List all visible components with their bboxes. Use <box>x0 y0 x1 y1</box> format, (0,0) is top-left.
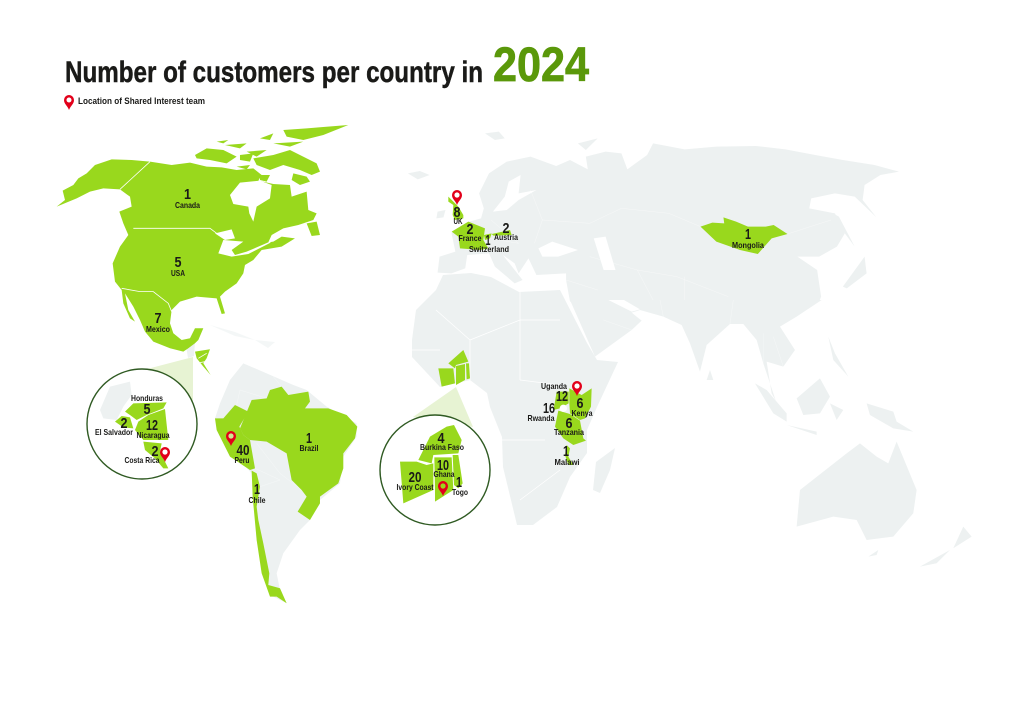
label: Nicaragua: 12 <box>146 417 158 434</box>
label: Rwanda <box>528 400 555 423</box>
Malawi <box>565 445 573 465</box>
label: Honduras: 5 <box>144 401 150 418</box>
label: Nicaragua <box>136 417 170 440</box>
label: Burkina Faso: 4 <box>438 430 445 447</box>
Hudson Bay and Great Lakes <box>215 181 272 257</box>
Uganda <box>553 392 569 410</box>
label: Ivory Coast: 20 <box>408 469 422 486</box>
Australasia and islands <box>707 337 972 567</box>
label: USA: 5 <box>174 254 182 271</box>
West Africa on map <box>438 350 470 387</box>
UK <box>448 197 463 220</box>
pin: Ghana <box>438 481 448 496</box>
Guatemala <box>186 342 195 358</box>
Brazil <box>240 387 357 520</box>
label: Rwanda: 16 <box>543 400 555 417</box>
Chile <box>252 471 287 603</box>
label: Burkina Faso: Burkina Faso <box>420 442 464 452</box>
label: Malawi: 1 <box>563 443 569 460</box>
label: France: France <box>458 233 482 243</box>
label: Mongolia: Mongolia <box>732 240 764 250</box>
label: Togo: 1 <box>456 474 462 491</box>
label: Austria: Austria <box>494 232 518 242</box>
label: Tanzania <box>554 415 584 437</box>
France <box>452 222 488 250</box>
label: USA <box>171 254 185 278</box>
Tanzania <box>555 411 586 445</box>
label: Malawi <box>554 443 580 467</box>
label: Tanzania: 6 <box>566 415 572 432</box>
label: Peru <box>234 442 250 465</box>
label: El Salvador: El Salvador <box>95 427 134 437</box>
label: Togo: Togo <box>452 487 468 497</box>
Eurasia <box>408 132 899 302</box>
label: Tanzania: Tanzania <box>554 427 584 437</box>
label: Mexico <box>146 310 170 334</box>
label: Canada: Canada <box>175 200 200 210</box>
label: Honduras: Honduras <box>131 393 163 403</box>
Peru <box>215 405 255 470</box>
label: Kenya: 6 <box>576 395 584 412</box>
label: Malawi: Malawi <box>554 457 580 467</box>
Arctic islands <box>195 125 348 236</box>
label: Mexico: Mexico <box>146 324 170 334</box>
label: Ghana <box>434 457 455 479</box>
label: Nicaragua: Nicaragua <box>136 430 170 440</box>
East Africa customers <box>553 388 592 465</box>
label: Uganda: Uganda <box>541 381 567 391</box>
label: Honduras <box>131 393 163 418</box>
title: 2024 <box>493 39 589 92</box>
label: Uganda <box>541 381 568 405</box>
Mongolia <box>701 217 787 254</box>
label: Burkina Faso <box>420 430 464 452</box>
inset circle: Central America <box>87 369 197 479</box>
inset pointer: West Africa <box>413 387 473 427</box>
title <box>65 39 589 92</box>
label: Chile: Chile <box>248 495 266 505</box>
pin: Kenya <box>572 381 582 396</box>
label: Brazil: 1 <box>306 430 312 447</box>
pin: UK <box>452 190 462 205</box>
label: France: 2 <box>466 221 474 238</box>
label: Ghana: Ghana <box>434 469 455 479</box>
label: Costa Rica: Costa Rica <box>124 455 160 465</box>
Madagascar <box>593 448 615 493</box>
label: Uganda: 12 <box>556 388 568 405</box>
label: Ivory Coast: Ivory Coast <box>396 482 434 492</box>
pin: Peru <box>226 431 236 446</box>
inset pointer: Central America <box>147 357 193 405</box>
label: Kenya: Kenya <box>572 408 593 418</box>
label: UK: 8 <box>454 204 460 221</box>
label: El Salvador <box>95 415 134 437</box>
South America <box>215 363 357 603</box>
label: Kenya <box>572 395 593 418</box>
label: Austria <box>494 220 518 242</box>
North America <box>57 125 348 375</box>
title: Number of customers per country in <box>65 56 483 89</box>
label: Switzerland <box>469 232 509 254</box>
Kenya <box>569 388 592 420</box>
Switzerland <box>484 233 492 240</box>
Europe customers <box>448 197 512 250</box>
label: Costa Rica: 2 <box>152 443 158 460</box>
label: Ghana: 10 <box>437 457 449 474</box>
legend: team location <box>64 95 205 110</box>
label: Rwanda: Rwanda <box>528 413 555 423</box>
label: Chile <box>248 481 266 505</box>
inset circle: West Africa <box>380 415 490 525</box>
label: Switzerland: 1 <box>486 232 490 249</box>
label: Brazil: Brazil <box>300 443 318 453</box>
Central America <box>195 349 211 375</box>
label: Peru: Peru <box>234 455 250 465</box>
label: Mongolia <box>732 226 764 250</box>
label: France <box>458 221 482 243</box>
label: El Salvador: 2 <box>120 415 128 432</box>
label: Austria: 2 <box>502 220 510 237</box>
world map: grey land <box>186 132 972 603</box>
pin: Costa Rica <box>160 447 170 462</box>
label: Brazil <box>300 430 318 453</box>
label: Peru: 40 <box>236 442 250 459</box>
label: Mongolia: 1 <box>745 226 751 243</box>
Caribbean <box>210 325 275 348</box>
label: Mexico: 7 <box>154 310 162 327</box>
Canada, USA, Mexico <box>57 159 317 352</box>
label: Costa Rica <box>124 443 160 465</box>
South Asia, Arabia and south-east Asia <box>570 300 822 420</box>
label: UK: UK <box>454 216 463 226</box>
label: Ivory Coast <box>396 469 434 492</box>
Africa <box>412 273 618 525</box>
Austria <box>492 230 512 236</box>
label: Chile: 1 <box>254 481 260 498</box>
label: Canada <box>175 186 200 210</box>
label: Canada: 1 <box>184 186 191 203</box>
label: USA: USA <box>171 268 185 278</box>
South America customers <box>215 387 357 603</box>
label: UK <box>454 204 463 226</box>
label: Togo <box>452 474 468 497</box>
label: Switzerland: Switzerland <box>469 244 509 254</box>
legend: team location: Location of Shared Interest team <box>78 96 205 107</box>
